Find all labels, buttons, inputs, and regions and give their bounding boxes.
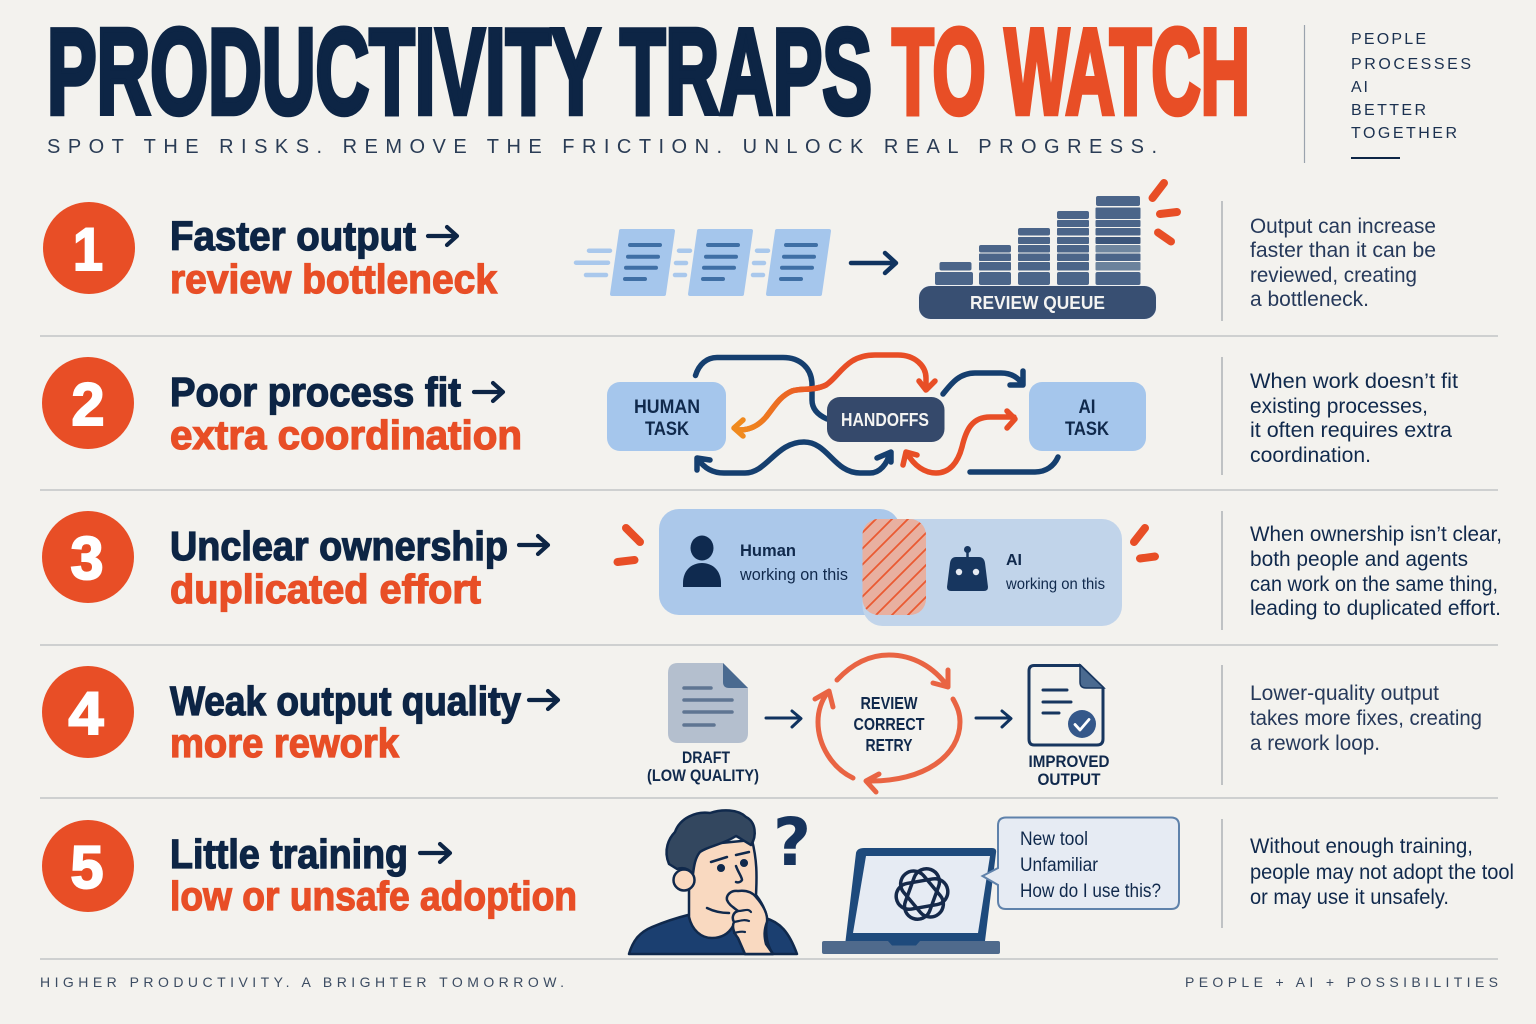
explanation 2: When work doesn’t fit [1250, 370, 1458, 393]
panel: trap 5 [42, 804, 1514, 954]
panel: trap 4 [42, 655, 1482, 792]
explanation 3: leading to duplicated effort. [1250, 597, 1501, 620]
human card: working on this [739, 565, 848, 584]
ai task box: TASK [1065, 419, 1109, 440]
alert sparks [1152, 183, 1177, 242]
side tagline: PEOPLE [1351, 31, 1426, 48]
subtitle: SPOT THE RISKS. REMOVE THE FRICTION. UNLOCK REAL PROGRESS. [47, 136, 1157, 158]
heading 4: more rework [170, 720, 399, 766]
explanation 5: people may not adopt the tool [1250, 861, 1514, 884]
heading 2 [170, 369, 522, 458]
explanation 3: can work on the same thing, [1250, 573, 1498, 596]
icon: question mark: ? [773, 804, 811, 881]
draft label: DRAFT [682, 749, 730, 767]
heading 1 [170, 213, 497, 302]
heading 2: extra coordination [170, 412, 522, 458]
heading 4 [170, 678, 558, 766]
explanation 1: reviewed, creating [1250, 264, 1417, 287]
heading 5 [170, 831, 577, 919]
explanation 4: a rework loop. [1250, 732, 1380, 755]
explanation 1: faster than it can be [1250, 239, 1436, 262]
heading 1: review bottleneck [170, 256, 497, 302]
heading 3 [170, 523, 548, 612]
side tagline: AI [1351, 79, 1368, 96]
overlap hatch [862, 519, 926, 615]
explanation 3: both people and agents [1250, 548, 1468, 571]
handoffs box: HANDOFFS [841, 410, 929, 430]
arrow [766, 711, 801, 727]
flow: tangled handoffs [607, 355, 1146, 473]
arrow [976, 711, 1011, 727]
review queue bar: REVIEW QUEUE [970, 293, 1105, 313]
explanation 4: Lower-quality output [1250, 682, 1439, 705]
title: PRODUCTIVITY TRAPS [47, 4, 872, 140]
explanation 2: it often requires extra [1250, 419, 1452, 442]
connector arrows [696, 355, 1058, 473]
rework loop: REVIEW [860, 693, 918, 713]
rework loop: RETRY [866, 735, 913, 755]
human task box [607, 382, 726, 451]
side tagline: PROCESSES [1351, 56, 1471, 73]
explanation 2: coordination. [1250, 444, 1371, 467]
draft label: (LOW QUALITY) [647, 767, 759, 785]
explanation 2: existing processes, [1250, 395, 1428, 418]
human task box: HUMAN [634, 397, 700, 418]
explanation 1 [1222, 201, 1436, 321]
right sparks [1134, 528, 1155, 558]
review queue bar [918, 286, 1156, 320]
speech bubble: New tool [1020, 829, 1088, 850]
chart: review queue stacks [935, 196, 1140, 285]
side tagline: TOGETHER [1351, 125, 1457, 142]
explanation 5 [1222, 819, 1514, 928]
explanation 5: or may use it unsafely. [1250, 886, 1449, 909]
explanation 4 [1222, 665, 1482, 785]
ai task box [1029, 382, 1146, 451]
speech bubble: Unfamiliar [1020, 855, 1099, 876]
human card: Human [740, 541, 796, 560]
heading 5: Little training [170, 831, 408, 877]
number badge 2: 2 [72, 371, 104, 438]
icon: knot logo [894, 865, 950, 923]
icon: robot [947, 546, 988, 591]
ai card: AI [1006, 552, 1022, 569]
draft label [647, 749, 759, 785]
illustration: confused person [629, 810, 797, 954]
heading 5: low or unsafe adoption [170, 873, 577, 919]
speech bubble: How do I use this? [1020, 881, 1161, 902]
left sparks [618, 528, 640, 562]
improved label: OUTPUT [1038, 771, 1100, 789]
explanation 3: When ownership isn’t clear, [1250, 523, 1502, 546]
side tagline: BETTER [1351, 102, 1426, 119]
explanation 4: takes more fixes, creating [1250, 707, 1482, 730]
number badge 3: 3 [70, 525, 104, 592]
number badge 4: 4 [68, 680, 104, 747]
heading 1: Faster output [170, 213, 416, 259]
explanation 3 [1222, 511, 1502, 630]
footer left: HIGHER PRODUCTIVITY. A BRIGHTER TOMORROW. [40, 974, 564, 990]
number badge 1 [43, 202, 135, 294]
human card [659, 509, 900, 615]
number badge 5: 5 [70, 834, 104, 901]
improved label [1028, 753, 1110, 789]
heading 3: duplicated effort [170, 566, 481, 612]
ai task box: AI [1078, 397, 1096, 418]
panel: trap 3 [42, 509, 1502, 630]
ai card [862, 519, 1122, 626]
icon: improved document [1029, 665, 1104, 745]
icon: person [683, 536, 721, 587]
rework loop: CORRECT [854, 714, 925, 734]
improved label: IMPROVED [1028, 753, 1110, 771]
speech bubble [982, 818, 1179, 909]
explanation 2 [1222, 357, 1458, 475]
explanation 1: a bottleneck. [1250, 288, 1369, 311]
icon: documents moving fast [576, 229, 831, 296]
icon: draft document [668, 663, 748, 743]
heading 2: Poor process fit [170, 369, 461, 415]
number badge 5 [42, 820, 134, 912]
human task box: TASK [645, 419, 689, 440]
handoffs box [827, 397, 944, 442]
rework loop [815, 655, 960, 792]
number badge 4 [42, 666, 134, 758]
number badge 2 [42, 357, 134, 449]
number badge 1: 1 [73, 216, 103, 283]
heading 4: Weak output quality [170, 678, 521, 724]
ai card: working on this [1005, 576, 1105, 593]
number badge 3 [42, 511, 134, 603]
panel: trap 1 [43, 183, 1436, 321]
side tagline [1304, 25, 1471, 163]
panel: trap 2 [42, 355, 1458, 475]
explanation 5: Without enough training, [1250, 835, 1473, 858]
heading 3: Unclear ownership [170, 523, 508, 569]
title: TO WATCH [892, 4, 1250, 140]
explanation 1: Output can increase [1250, 215, 1436, 238]
footer right: PEOPLE + AI + POSSIBILITIES [1185, 974, 1498, 990]
icon: laptop with logo [822, 848, 1000, 954]
arrow [851, 253, 896, 273]
